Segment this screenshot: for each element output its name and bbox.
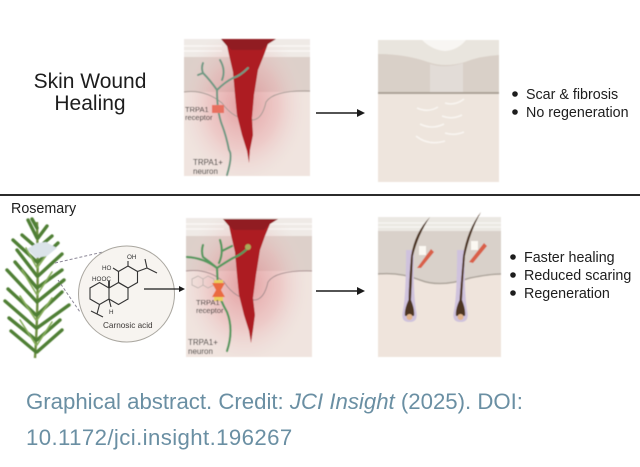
arrow: top xyxy=(316,109,365,117)
text: top outcomes xyxy=(512,87,629,121)
label: TRPA1+ neuron: TRPA1+ xyxy=(188,338,218,347)
label: TRPA1+ neuron xyxy=(193,158,223,176)
callout: carnosic acid molecule: H xyxy=(109,309,114,316)
callout: carnosic acid molecule xyxy=(78,246,174,342)
neuron xyxy=(198,60,248,175)
caption: 10.1172/jci.insight.196267 xyxy=(26,425,293,450)
panel: regenerated skin with hair follicles xyxy=(378,212,501,357)
dashed leaders xyxy=(55,252,103,312)
label: TRPA1 receptor: receptor xyxy=(196,306,224,315)
label: TRPA1+ neuron: TRPA1+ xyxy=(193,158,223,167)
caption xyxy=(26,389,523,450)
callout: carnosic acid molecule: OH xyxy=(127,254,137,261)
icon: TRPA1 receptor xyxy=(212,280,225,301)
rosemary flower xyxy=(27,242,57,258)
heading: Rosemary: Rosemary xyxy=(11,201,77,217)
text: bottom outcomes: Regeneration xyxy=(524,286,610,302)
hair follicle left xyxy=(402,217,434,322)
panel: treated wound xyxy=(186,218,312,357)
text: bottom outcomes: Faster healing xyxy=(524,250,615,266)
label: TRPA1+ neuron: neuron xyxy=(188,347,213,356)
label: TRPA1+ neuron: neuron xyxy=(193,167,218,176)
callout: carnosic acid molecule: HO xyxy=(102,265,112,272)
hair follicle right xyxy=(453,212,487,322)
arrow: molecule to wound xyxy=(144,286,185,292)
icon: TRPA1 receptor xyxy=(212,105,224,113)
text: top outcomes: Scar & fibrosis xyxy=(526,87,618,103)
title: Skin Wound Healing xyxy=(34,70,146,115)
molecule ghost xyxy=(192,276,214,288)
text: bottom outcomes xyxy=(510,250,631,302)
scar fibres xyxy=(416,99,464,143)
caption: Graphical abstract. Credit: JCI Insight (2025). DOI: xyxy=(26,389,523,414)
arrow: bottom xyxy=(316,287,365,295)
structure xyxy=(90,259,157,317)
wound xyxy=(223,219,278,343)
label: TRPA1 receptor: TRPA1 xyxy=(196,298,220,307)
callout: carnosic acid molecule: HOOC xyxy=(92,276,111,283)
text: bottom outcomes: Reduced scaring xyxy=(524,268,631,284)
title: Skin Wound Healing: Healing xyxy=(54,92,126,115)
text: top outcomes: No regeneration xyxy=(526,105,629,121)
callout: carnosic acid molecule: Carnosic acid xyxy=(103,321,153,330)
label: TRPA1+ neuron xyxy=(188,338,218,356)
label: TRPA1 receptor xyxy=(185,105,213,122)
label: TRPA1 receptor: receptor xyxy=(185,113,213,122)
divider xyxy=(0,194,640,196)
panel: wound with TRPA1 neuron xyxy=(184,39,310,176)
panel: scarred skin xyxy=(378,40,499,182)
label: TRPA1 receptor: TRPA1 xyxy=(185,105,209,114)
neuron xyxy=(187,240,248,351)
label: TRPA1 receptor xyxy=(196,298,224,315)
icon: rosemary sprig xyxy=(5,219,69,358)
title: Skin Wound Healing: Skin Wound xyxy=(34,70,146,93)
wound xyxy=(221,39,276,163)
